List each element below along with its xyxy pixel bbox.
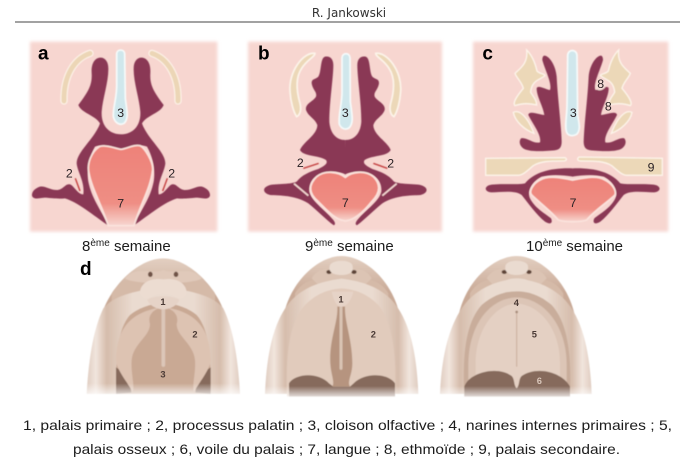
panel b letter: b — [258, 44, 270, 65]
caption: 10th week: 10 — [526, 238, 543, 255]
panel a letter: a — [38, 44, 49, 65]
panel a labels — [66, 106, 175, 210]
panel c letter: c — [482, 44, 493, 65]
panel d first view labels: 1 — [160, 297, 166, 307]
panel b drawing — [264, 53, 427, 225]
panel d: palate view, 8th week — [80, 258, 250, 398]
panel d letter: d — [80, 259, 92, 280]
panel c labels — [570, 77, 655, 210]
legend text: 1, palais primaire ; 2, processus palatin ; 3, cloison olfactive ; 4, narines internes primaires ; 5, — [23, 417, 672, 433]
panel c labels: 7 — [570, 196, 577, 210]
panel b background — [248, 42, 442, 232]
panel d third view labels: 6 — [537, 376, 542, 386]
panel c labels: 3 — [570, 106, 577, 120]
panel d third view labels: 4 — [514, 298, 520, 308]
panel d first view labels: 3 — [160, 370, 166, 380]
caption: 10th week: ème — [543, 238, 563, 249]
panel d third view labels — [514, 298, 542, 386]
panel c background — [473, 42, 668, 232]
panel d first view labels — [160, 297, 198, 380]
author name: R. Jankowski — [312, 6, 386, 20]
panel d first view labels: 2 — [192, 329, 198, 339]
panel a labels: 2 — [168, 166, 175, 180]
caption: 10th week: semaine — [562, 238, 623, 255]
panel c drawing — [486, 50, 662, 223]
panel a drawing — [32, 50, 210, 226]
panel b labels: 7 — [342, 196, 349, 210]
panel a labels: 2 — [66, 166, 73, 180]
panel d: palate view, 10th week — [435, 256, 598, 400]
caption: 9th week: ème — [313, 238, 333, 249]
caption: 9th week: 9 — [305, 238, 313, 255]
panel c labels: 8 — [597, 77, 604, 91]
panel d second view labels: 2 — [371, 330, 376, 340]
panel c: 10th week section — [473, 42, 668, 232]
panel d second view labels: 1 — [338, 294, 344, 304]
panel b labels: 3 — [342, 106, 349, 120]
caption: 8th week: ème — [90, 238, 110, 249]
panel d third view labels: 5 — [532, 330, 537, 340]
panel b: 9th week section — [248, 42, 442, 232]
caption: 8th week: semaine — [110, 238, 171, 255]
panel d second view labels — [338, 294, 376, 340]
panel a labels: 7 — [117, 196, 124, 210]
legend text — [23, 417, 672, 457]
caption: 9th week: semaine — [333, 238, 394, 255]
caption: 8th week: 8 — [82, 238, 90, 255]
panel d: palate view, 9th week — [262, 256, 598, 400]
panel b labels: 2 — [297, 156, 304, 170]
panel b labels — [297, 106, 394, 210]
panel a labels: 3 — [117, 106, 124, 120]
panel b labels: 2 — [387, 157, 394, 171]
panel a: 8th week section — [30, 42, 217, 232]
panel a background — [30, 42, 217, 232]
legend text: palais osseux ; 6, voile du palais ; 7, langue ; 8, ethmoïde ; 9, palais secondaire. — [73, 441, 620, 457]
panel c labels: 8 — [605, 99, 612, 113]
panel c labels: 9 — [648, 160, 655, 174]
